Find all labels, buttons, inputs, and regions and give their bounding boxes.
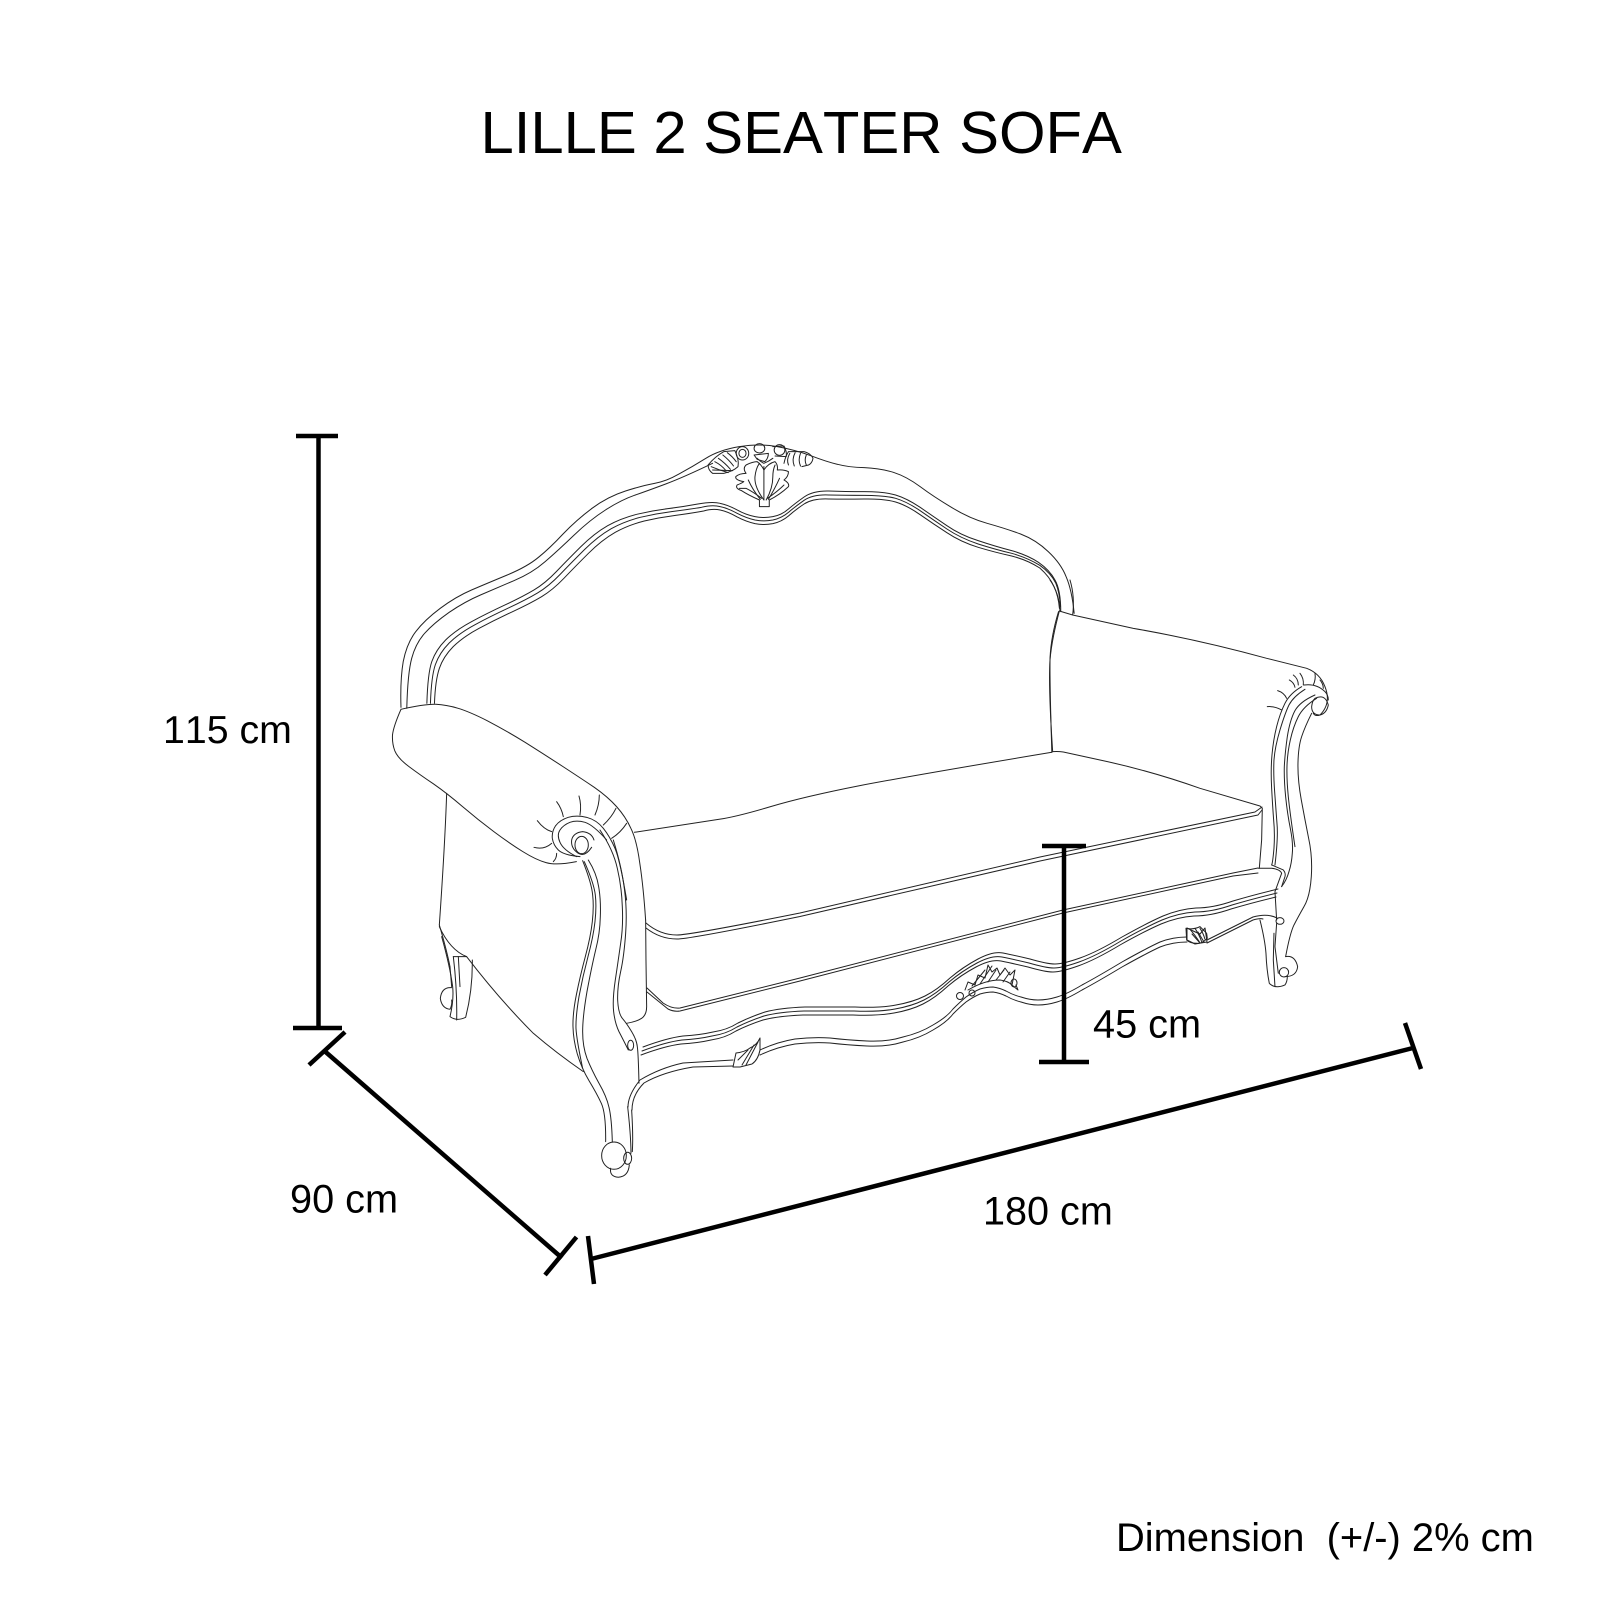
dimension: height 115 cm <box>293 436 342 1028</box>
title: LILLE 2 SEATER SOFA <box>480 99 1122 166</box>
label: 90 cm: 90 cm <box>290 1178 398 1222</box>
front foot <box>602 1107 633 1177</box>
left armrest <box>392 612 1059 920</box>
right back arm and post <box>1050 580 1328 987</box>
seat cushion and rail <box>628 807 1278 1110</box>
crest carving <box>708 444 813 507</box>
label: 45 cm: 45 cm <box>1093 1002 1201 1046</box>
lower rail moulding <box>628 915 1277 1110</box>
upper rail moulding <box>641 889 1278 1055</box>
sofa backrest <box>401 444 1074 708</box>
footnote: dimension tolerance: Dimension (+/-) 2% cm <box>1116 1516 1534 1560</box>
scroll and tufting <box>534 795 627 900</box>
dimension: seat height 45 cm <box>1039 846 1089 1062</box>
sofa line drawing <box>392 444 1328 1177</box>
front arm post and leg <box>439 793 647 1177</box>
label: 180 cm: 180 cm <box>983 1190 1113 1234</box>
rail carvings <box>733 928 1207 1067</box>
side panel and rear leg <box>439 793 583 1072</box>
label: 115 cm: 115 cm <box>163 708 292 752</box>
dimension: depth 90 cm <box>309 1032 576 1275</box>
dimension: width 180 cm <box>588 1023 1421 1284</box>
